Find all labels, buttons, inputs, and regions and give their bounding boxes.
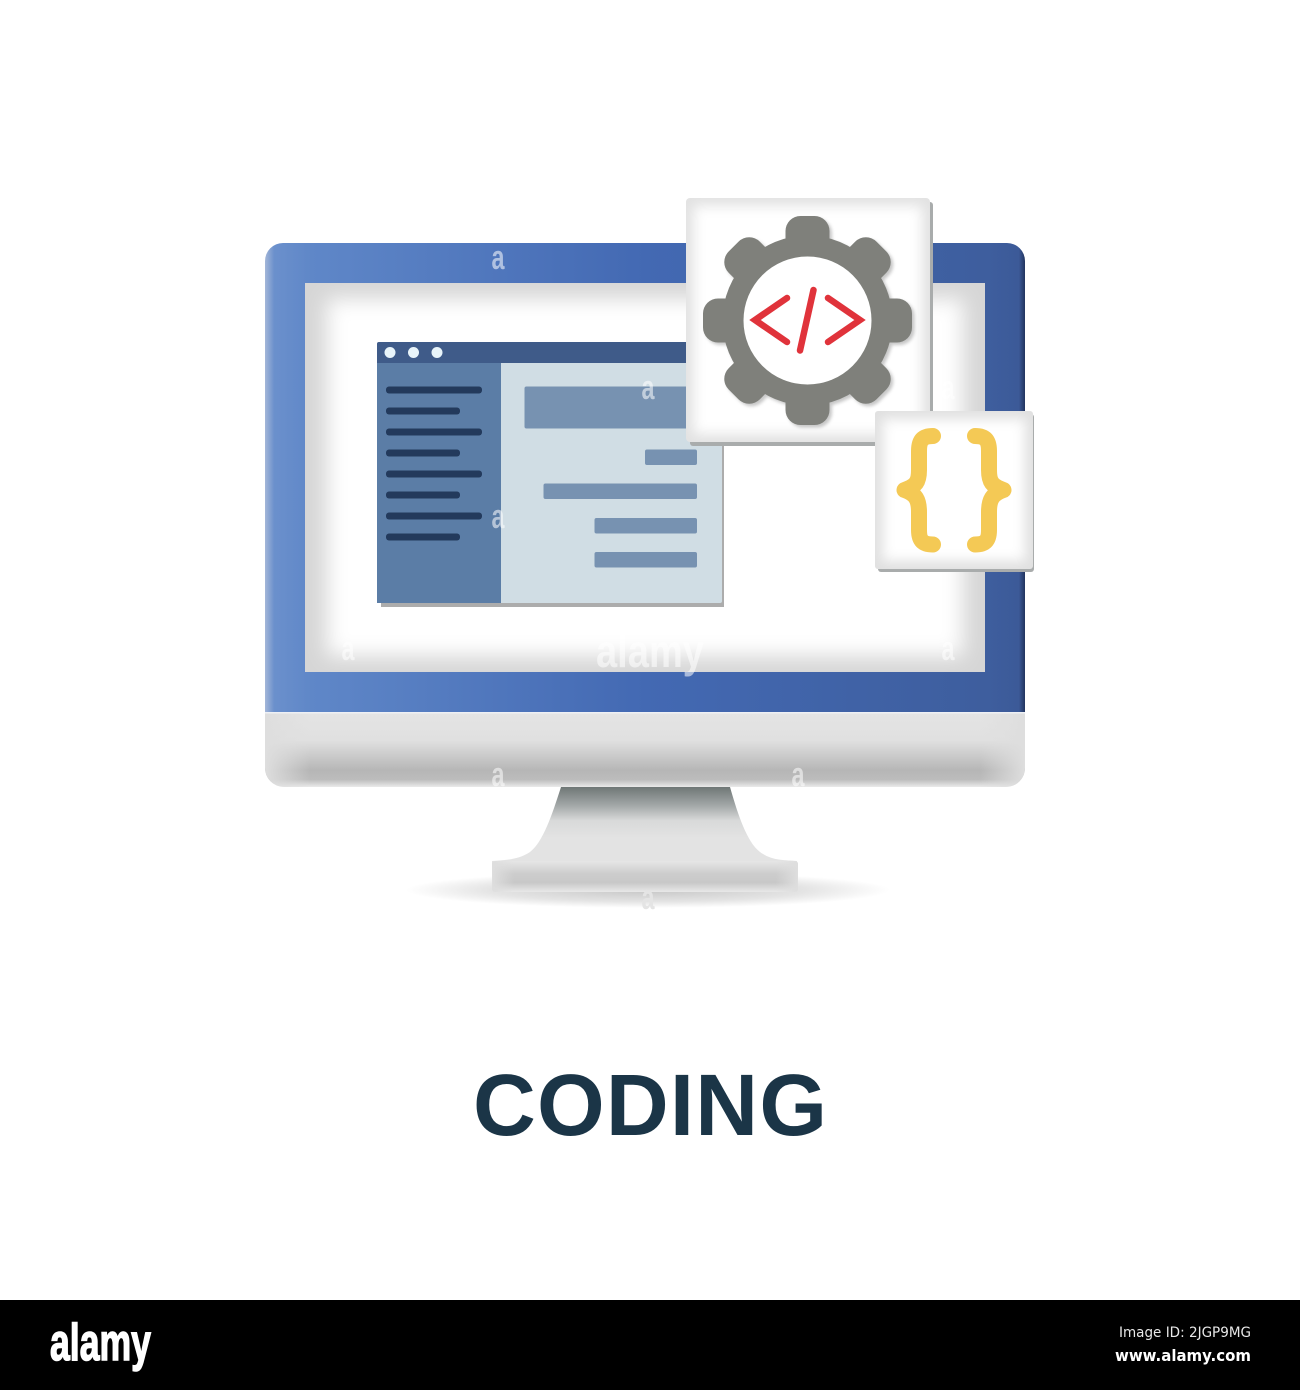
content blocks	[524, 386, 698, 568]
window sidebar	[377, 363, 501, 603]
watermarks: a	[642, 879, 655, 917]
monitor bezel	[265, 243, 1025, 712]
watermarks: a	[492, 239, 505, 277]
watermarks: a	[792, 756, 805, 794]
card face	[875, 411, 1033, 569]
monitor stand base	[492, 861, 798, 892]
watermarks: a	[942, 630, 955, 668]
watermarks: alamy	[596, 625, 704, 677]
floor shadow	[406, 872, 890, 908]
sidebar code lines	[386, 386, 482, 540]
card face	[686, 198, 930, 442]
watermarks	[342, 239, 955, 917]
watermarks: a	[942, 369, 955, 407]
watermarks: a	[342, 630, 355, 668]
monitor stand neck	[492, 787, 797, 880]
watermarks: a	[492, 498, 505, 536]
window title bar	[377, 342, 722, 363]
icon: desktop monitor	[265, 243, 1025, 908]
footer bar	[0, 1300, 1300, 1390]
website: www.alamy.com	[1115, 1346, 1251, 1365]
monitor chin	[265, 712, 1025, 787]
gear centre	[744, 256, 872, 384]
window content area	[377, 342, 722, 603]
icon: code tag symbol	[755, 290, 860, 350]
card: curly braces	[875, 411, 1034, 572]
footer logo: alamy	[50, 1314, 151, 1372]
icon: curly braces	[904, 436, 1004, 544]
image id: Image ID: 2JGP9MG	[1119, 1325, 1251, 1341]
card: gear with code symbol	[686, 198, 933, 446]
watermarks: a	[492, 756, 505, 794]
card shadow	[878, 414, 1034, 572]
window shadow	[381, 346, 724, 607]
window control dots	[384, 347, 442, 358]
icon: gear	[703, 216, 912, 425]
panel: code editor window	[377, 342, 724, 607]
card shadow	[690, 202, 933, 446]
monitor screen	[305, 283, 985, 672]
gear shadow	[706, 218, 914, 428]
title: CODING	[473, 1057, 827, 1154]
watermarks: a	[642, 369, 655, 407]
